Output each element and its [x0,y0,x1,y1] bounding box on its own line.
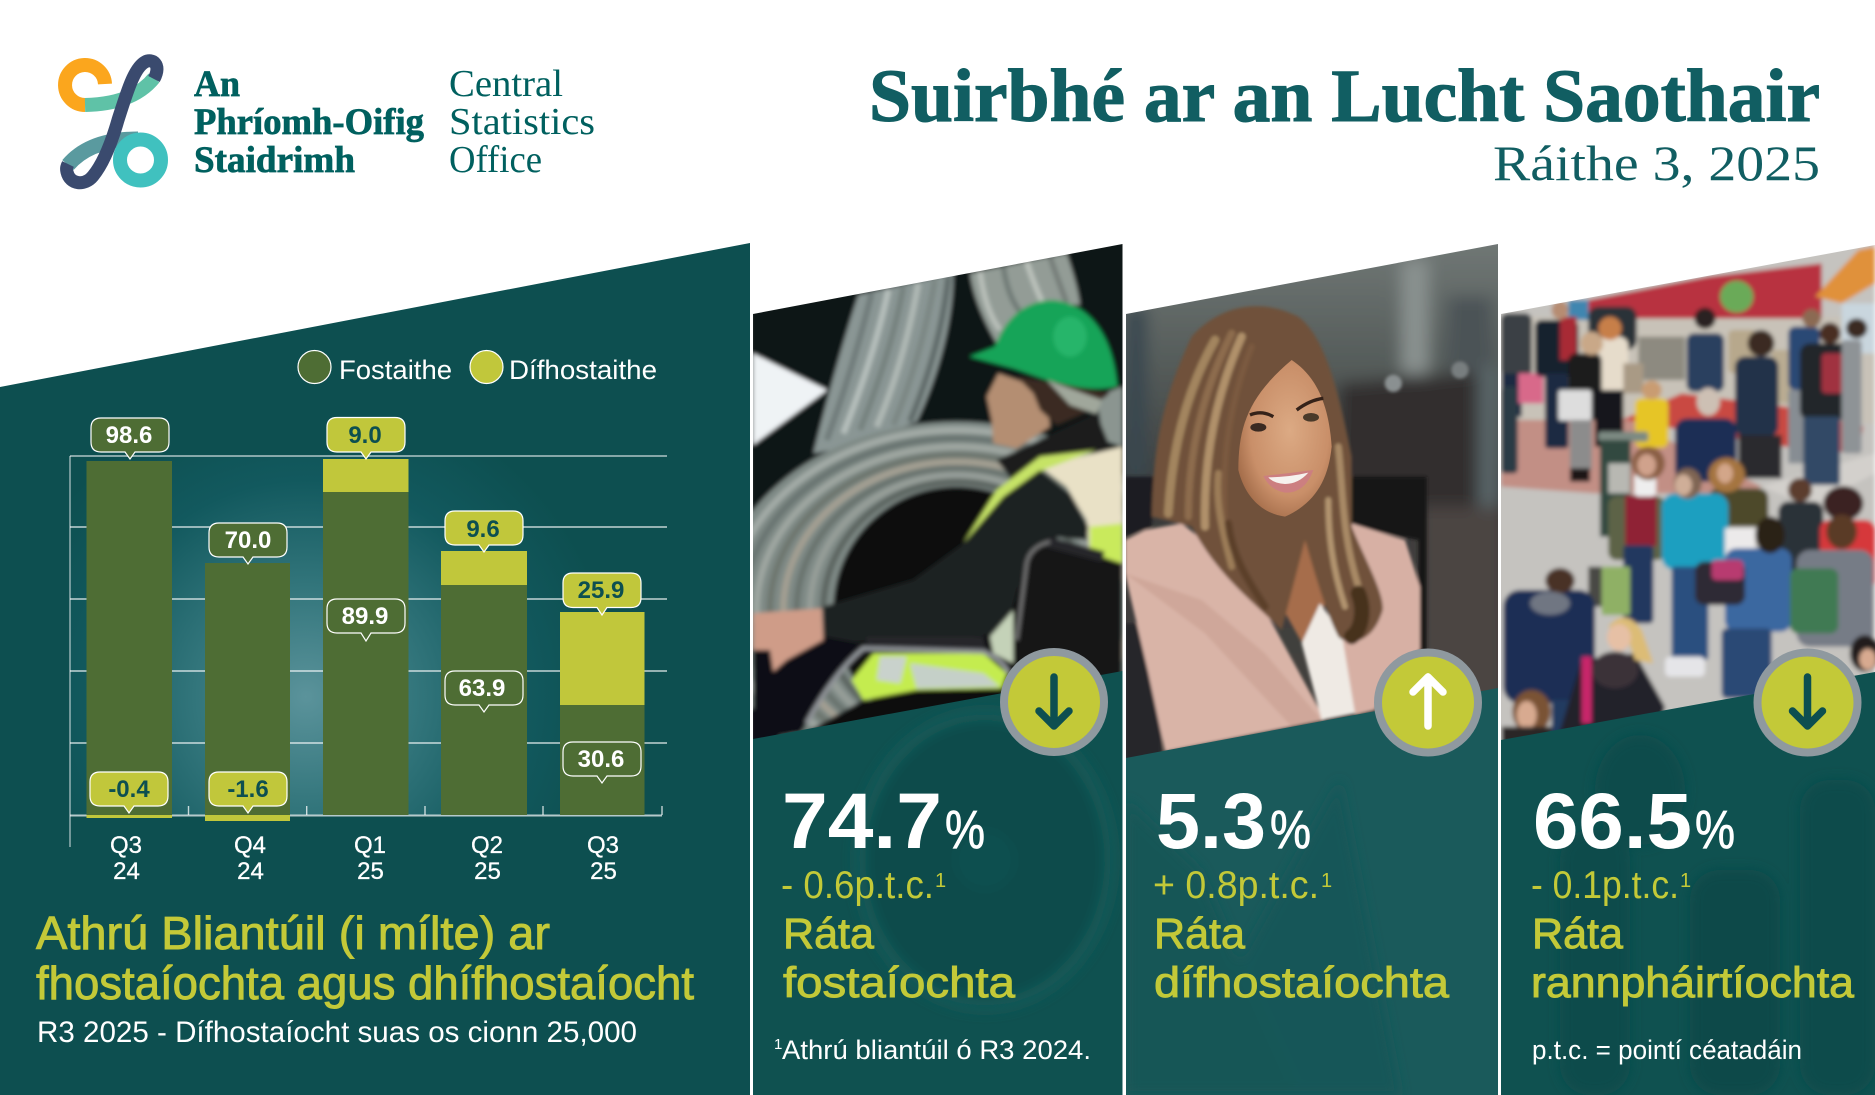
label: employment rate [783,910,1015,1007]
title: Suirbhé ar an Lucht Saothair [869,55,1820,138]
photo: street crowd [1495,240,1875,760]
axis labels [110,832,619,885]
axis labels: 25 [590,858,617,885]
value: 66.5%: 66.5 [1533,776,1692,865]
photo: smiling woman [1126,244,1498,758]
icon: up arrow [1378,652,1478,752]
value: 66.5%: % [1695,800,1735,860]
callout: 89.9 [327,599,405,641]
logo text: Irish name: An [194,64,240,105]
bars: Q2 25 [441,551,527,815]
legend: Fostaithe [339,355,452,385]
panel: annual change chart [0,243,750,1095]
callout: 25.9: 25.9 [578,577,624,604]
footnote: Athrú bliantúil ó R3 2024. [782,1035,1091,1065]
change: -0.1 percentage points: - 0.1p.t.c. [1531,864,1679,907]
footnote: percentage points key: p.t.c. = pointí céatadáin [1532,1035,1802,1065]
bars: Q1 25 [323,459,408,815]
callout: 70.0 [209,523,287,564]
chart subheading: R3 2025 - Dífhostaíocht suas os cionn 25,000 [37,1016,637,1049]
value: 5.3%: % [1270,800,1311,860]
callout: 30.6 [563,742,641,783]
callout: 63.9 [445,671,523,712]
subtitle: Ráithe 3, 2025 [1493,135,1820,191]
legend [298,350,657,385]
label: unemployment rate: Ráta [1154,910,1245,958]
panel: participation stat background [1501,660,1875,1095]
value: 74.7%: 74.7 [782,776,942,865]
panel: unemployment rate [1126,244,1498,1095]
bars: Q3 24 [86,461,172,818]
axis labels: 24 [113,858,140,885]
logo text: Irish name: Staidrimh [194,140,355,181]
change: +0.8 percentage points: 1 [1321,870,1332,892]
axis labels: Q3 [110,832,142,859]
callout: 98.6 [91,418,169,459]
photo: worker in wheelchair [753,244,1122,739]
panel: unemployment stat background [1126,680,1498,1095]
axis labels: Q2 [471,832,503,859]
callout: 98.6: 98.6 [106,422,152,449]
value: 74.7%: % [945,800,985,860]
logo text: Irish name [194,64,424,181]
logo text: English name: Statistics [449,101,595,143]
callout: 70.0: 70.0 [225,527,271,554]
change: -0.6 percentage points: - 0.6p.t.c. [781,864,934,907]
label: unemployment rate [1154,910,1449,1007]
axis labels: 25 [474,858,501,885]
chart heading [36,907,694,1009]
axis labels: 25 [357,858,384,885]
chart heading: Athrú Bliantúil (i mílte) ar [36,907,550,959]
icon: CSO knot mark [65,61,161,183]
change: -0.6 percentage points: 1 [935,870,946,892]
panel: employment stat background [753,660,1123,1095]
chart heading: fhostaíochta agus dhífhostaíocht [36,957,694,1009]
legend: Dífhostaithe [509,355,657,385]
callout: -1.6: -1.6 [227,776,269,803]
callout: 89.9: 89.9 [342,603,388,630]
label: participation rate: Ráta [1532,910,1623,958]
callout: -0.4 [90,772,168,813]
stacked bar chart [70,418,667,885]
panel: participation rate [1495,240,1875,1095]
footnote: 1 [774,1036,782,1053]
bars: Q3 25 [560,612,644,815]
value: 5.3%: 5.3 [1156,776,1266,865]
axis labels: Q3 [587,832,619,859]
label: employment rate: fostaíochta [783,959,1015,1007]
label: unemployment rate: dífhostaíochta [1154,959,1449,1007]
logo text: English name [449,63,595,181]
logo [65,61,595,183]
logo text: Irish name: Phríomh-Oifig [194,102,424,143]
callout: 63.9: 63.9 [459,675,505,702]
callout: 9.6 [445,511,523,552]
icon: down arrow [1758,652,1858,752]
logo text: English name: Central [449,63,563,105]
callout: 9.0 [327,418,405,459]
callout: 30.6: 30.6 [578,746,624,773]
label: participation rate [1531,910,1854,1007]
label: participation rate: rannpháirtíochta [1531,959,1854,1007]
panel: employment rate [753,244,1122,1095]
axis labels: Q1 [354,832,386,859]
label: employment rate: Ráta [783,910,874,958]
callout: -0.4: -0.4 [108,776,150,803]
chart glow [70,456,667,815]
callout: 25.9 [563,573,641,615]
callout: 9.6: 9.6 [466,516,500,543]
logo text: English name: Office [449,139,542,181]
axis labels: 24 [237,858,264,885]
change: +0.8 percentage points: + 0.8p.t.c. [1153,864,1319,907]
panel background [0,243,750,1095]
bars: Q4 24 [205,563,290,821]
axis labels: Q4 [234,832,266,859]
icon: down arrow [1004,652,1104,752]
callout: -1.6 [209,772,287,813]
change: -0.1 percentage points: 1 [1680,870,1691,892]
callout: 9.0: 9.0 [348,422,382,449]
